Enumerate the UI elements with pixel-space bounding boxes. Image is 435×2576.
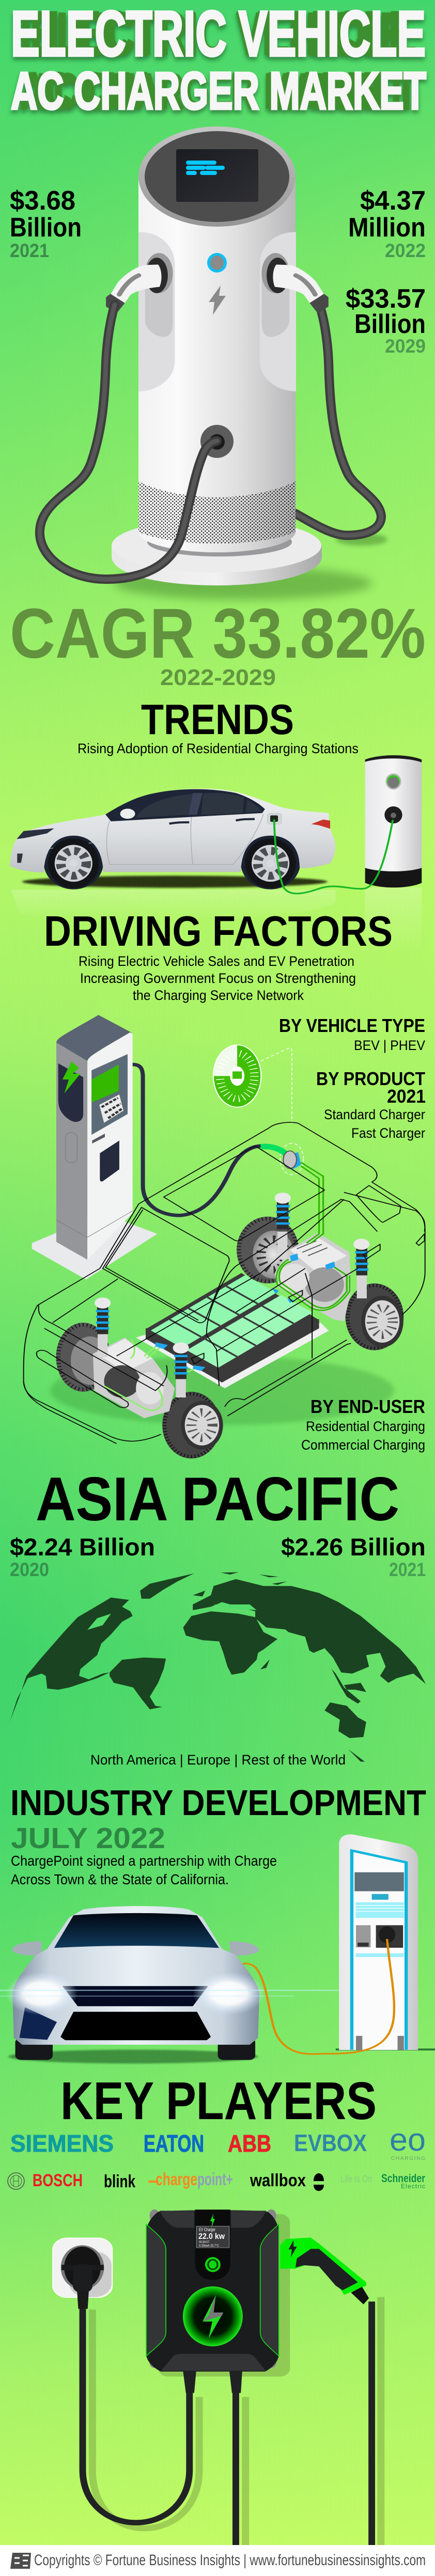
- headlight: [17, 828, 54, 839]
- charger body: [138, 177, 296, 552]
- illustration: AC charging station: [40, 126, 387, 600]
- stat: 2029 market size: $33.57: [346, 284, 426, 314]
- reflection: [11, 887, 422, 955]
- station cable: [133, 1064, 261, 1215]
- car windows: [105, 789, 265, 821]
- logo: eo Charging: eo: [390, 2122, 426, 2158]
- logo: Bosch: [8, 2171, 83, 2190]
- left cable: [40, 305, 217, 579]
- rear motor: [275, 1233, 351, 1322]
- segment: by end-user: Commercial Charging: [301, 1437, 425, 1453]
- post shadow: [336, 2048, 435, 2050]
- segment: by end-user: BY END-USER: [310, 1396, 425, 1417]
- footer logo: [10, 2553, 31, 2569]
- wall socket: [53, 2238, 112, 2309]
- text: development description: [11, 1853, 277, 1887]
- Madagascar: [260, 1659, 270, 1669]
- logo: eo Charging: CHARGING: [391, 2156, 425, 2161]
- text: development description: Across Town & the State of California.: [11, 1871, 229, 1887]
- screen readout: [186, 161, 225, 175]
- Australia: [324, 1703, 366, 1738]
- logo: Wallbox: wallbox: [250, 2171, 306, 2190]
- title: [11, 0, 426, 120]
- status light: [207, 253, 227, 273]
- illustration: sedan charging at home station: [10, 755, 422, 955]
- car charge port: [268, 814, 282, 824]
- stat: asia pacific 2021: [281, 1533, 426, 1580]
- car body: [10, 789, 335, 872]
- logo: ChargePoint: [148, 2170, 233, 2189]
- Arctic islands: [221, 1572, 287, 1585]
- right cable: [296, 304, 381, 535]
- green connector: [261, 1147, 287, 1155]
- stat: asia pacific 2020: $2.24 Billion: [10, 1533, 155, 1561]
- logo: Schneider Electric: Schneider: [381, 2172, 425, 2185]
- text: driving factors list: Increasing Government Focus on Strengthening: [80, 971, 356, 986]
- charger icon: bolt above screen: [210, 2214, 215, 2228]
- LCD panel: [196, 2226, 229, 2248]
- green status ring: [183, 2286, 243, 2346]
- charger base: [112, 519, 322, 585]
- windshield: [54, 1913, 219, 1948]
- green charging cable: [274, 819, 393, 894]
- illustration: car front and charging post: [0, 1834, 435, 2063]
- icon: battery gauge disc: [213, 1045, 261, 1107]
- segment: by product: [316, 1068, 426, 1141]
- text: other regions: North America | Europe | Rest of the World: [90, 1752, 346, 1768]
- power button: [205, 2257, 221, 2272]
- left connector assembly: [106, 232, 175, 391]
- LCD readout: EV Charger: [199, 2227, 215, 2232]
- stat: asia pacific 2021: $2.26 Billion: [281, 1533, 426, 1561]
- logo: Siemens: SIEMENS: [10, 2130, 114, 2157]
- Africa: [183, 1611, 277, 1675]
- heading: key players: KEY PLAYERS: [60, 2071, 377, 2130]
- shock absorbers: [95, 1192, 369, 1397]
- illustration: DC station and EV wireframe: [24, 1015, 425, 1458]
- LCD readout: 00:30:07: [199, 2241, 210, 2244]
- logo: EVBox: EVBOX: [294, 2129, 367, 2156]
- logo: Schneider Electric: Life Is On: [340, 2174, 372, 2185]
- Southeast Asia: [332, 1669, 366, 1704]
- logo: ABB: ABB: [228, 2130, 271, 2157]
- text: driving factors list: Rising Electric Vehicle Sales and EV Penetration: [79, 953, 354, 969]
- mains cable: [83, 2309, 190, 2523]
- car body: [12, 1906, 259, 2045]
- stat: 2029 market size: 2029: [385, 336, 426, 357]
- North America: [10, 1598, 133, 1722]
- stat: 2021 market size: 2021: [10, 240, 49, 261]
- segment: by product: Standard Charger: [324, 1107, 425, 1122]
- right connector assembly: [260, 232, 329, 391]
- charger shadows: [92, 2214, 381, 2545]
- segment: by vehicle type: BEV | PHEV: [354, 1038, 425, 1053]
- Eurasia: [193, 1579, 426, 1684]
- wheel arches: [43, 835, 301, 889]
- stat: 2022 market size: $4.37: [360, 186, 426, 216]
- heading: driving factors: DRIVING FACTORS: [44, 907, 393, 955]
- logo: ChargePoint: point+: [197, 2170, 233, 2189]
- ground shadow: [50, 1356, 394, 1425]
- Greenland: [140, 1573, 194, 1599]
- speaker grille: [138, 481, 296, 544]
- connector handle: [280, 2237, 369, 2304]
- text: driving factors list: [79, 953, 356, 1003]
- New Zealand: [348, 1749, 365, 1761]
- text: driving factors list: the Charging Service Network: [133, 988, 304, 1003]
- stat: 2021 market size: [10, 186, 82, 261]
- light flare: [0, 1990, 350, 1996]
- home charger: [365, 755, 422, 887]
- icon: lightning: [209, 285, 226, 315]
- logo: Schneider Electric: [340, 2172, 425, 2190]
- logo: ChargePoint: charge: [156, 2170, 197, 2189]
- segment: by vehicle type: [279, 1015, 425, 1053]
- station column: [56, 1015, 133, 1260]
- station base plate: [32, 1213, 157, 1280]
- charging post: [339, 1834, 418, 2050]
- battery pack: [136, 1273, 329, 1388]
- output cables: [236, 2301, 372, 2545]
- logo: Schneider Electric: Electric: [401, 2183, 425, 2190]
- segment: by end-user: Residential Charging: [306, 1419, 425, 1434]
- fog panel: [20, 2007, 57, 2040]
- front grille: [17, 854, 23, 863]
- charging sockets and connectors: [106, 232, 329, 391]
- charger housing: [146, 2209, 279, 2372]
- text: development description: ChargePoint signed a partnership with Charge: [11, 1853, 277, 1869]
- stat: 2021 market size: $3.68: [10, 186, 75, 216]
- car wireframe: [24, 1122, 425, 1443]
- segment: by end-user: [301, 1396, 425, 1453]
- charge port ring: [283, 1151, 297, 1168]
- stat: 2022 market size: [348, 186, 426, 261]
- logo: Bosch: BOSCH: [33, 2171, 83, 2190]
- stat: 2029 market size: [346, 284, 426, 357]
- segment: by product: Fast Charger: [351, 1125, 425, 1141]
- stat: 2022 market size: Million: [348, 213, 426, 243]
- car details: [15, 814, 263, 865]
- mirrors: [12, 1942, 259, 1956]
- stat: asia pacific 2021: 2021: [389, 1559, 426, 1580]
- front motor: [93, 1338, 175, 1418]
- date: JULY 2022: [11, 1822, 165, 1855]
- car shadow: [22, 876, 328, 888]
- LCD readout: [198, 2227, 225, 2248]
- green wiring: [104, 1163, 350, 1410]
- taillight: [312, 819, 330, 829]
- British Isles: [193, 1591, 205, 1596]
- logo: Blink: blink: [104, 2172, 135, 2191]
- LCD readout: 22.0 kw: [198, 2232, 225, 2241]
- heading: asia pacific: ASIA PACIFIC: [36, 1465, 399, 1534]
- stat: asia pacific 2020: [10, 1533, 155, 1580]
- stat: 2029 market size: Billion: [354, 309, 426, 339]
- cable socket: [200, 425, 234, 458]
- dashed link lines: [261, 1047, 303, 1174]
- Mediterranean: [213, 1604, 257, 1610]
- blue connectors: [156, 1152, 335, 1371]
- ground shadow: [8, 2049, 258, 2063]
- headlight glows: [6, 1971, 265, 2015]
- stat: 2021 market size: Billion: [10, 213, 82, 243]
- orange cable: [243, 1939, 394, 2054]
- charger head: [138, 126, 296, 227]
- wheels: [48, 838, 296, 888]
- tyres: [15, 2038, 255, 2060]
- stat: asia pacific 2020: 2020: [10, 1559, 49, 1580]
- LCD readout: 0.33kwh 25.7°C: [199, 2245, 220, 2248]
- segment: by product: 2021: [387, 1086, 426, 1107]
- grip sleeves: [183, 2372, 242, 2393]
- logo: Eaton: EATON: [144, 2130, 204, 2157]
- stat: 2022 market size: 2022: [385, 240, 426, 261]
- heading: trends: TRENDS: [141, 695, 294, 743]
- South America: [110, 1658, 166, 1709]
- Hudson Bay: [87, 1614, 111, 1630]
- upper grille: [63, 1986, 208, 2006]
- CAGR period: 2022-2029: [160, 665, 276, 690]
- illustration: wall charger: [53, 2209, 381, 2545]
- EV wheels: [56, 1217, 403, 1458]
- text: trends description: Rising Adoption of Residential Charging Stations: [77, 741, 359, 756]
- lower grille: [60, 2012, 211, 2040]
- footer: [0, 2545, 435, 2576]
- world map: [10, 1572, 426, 1761]
